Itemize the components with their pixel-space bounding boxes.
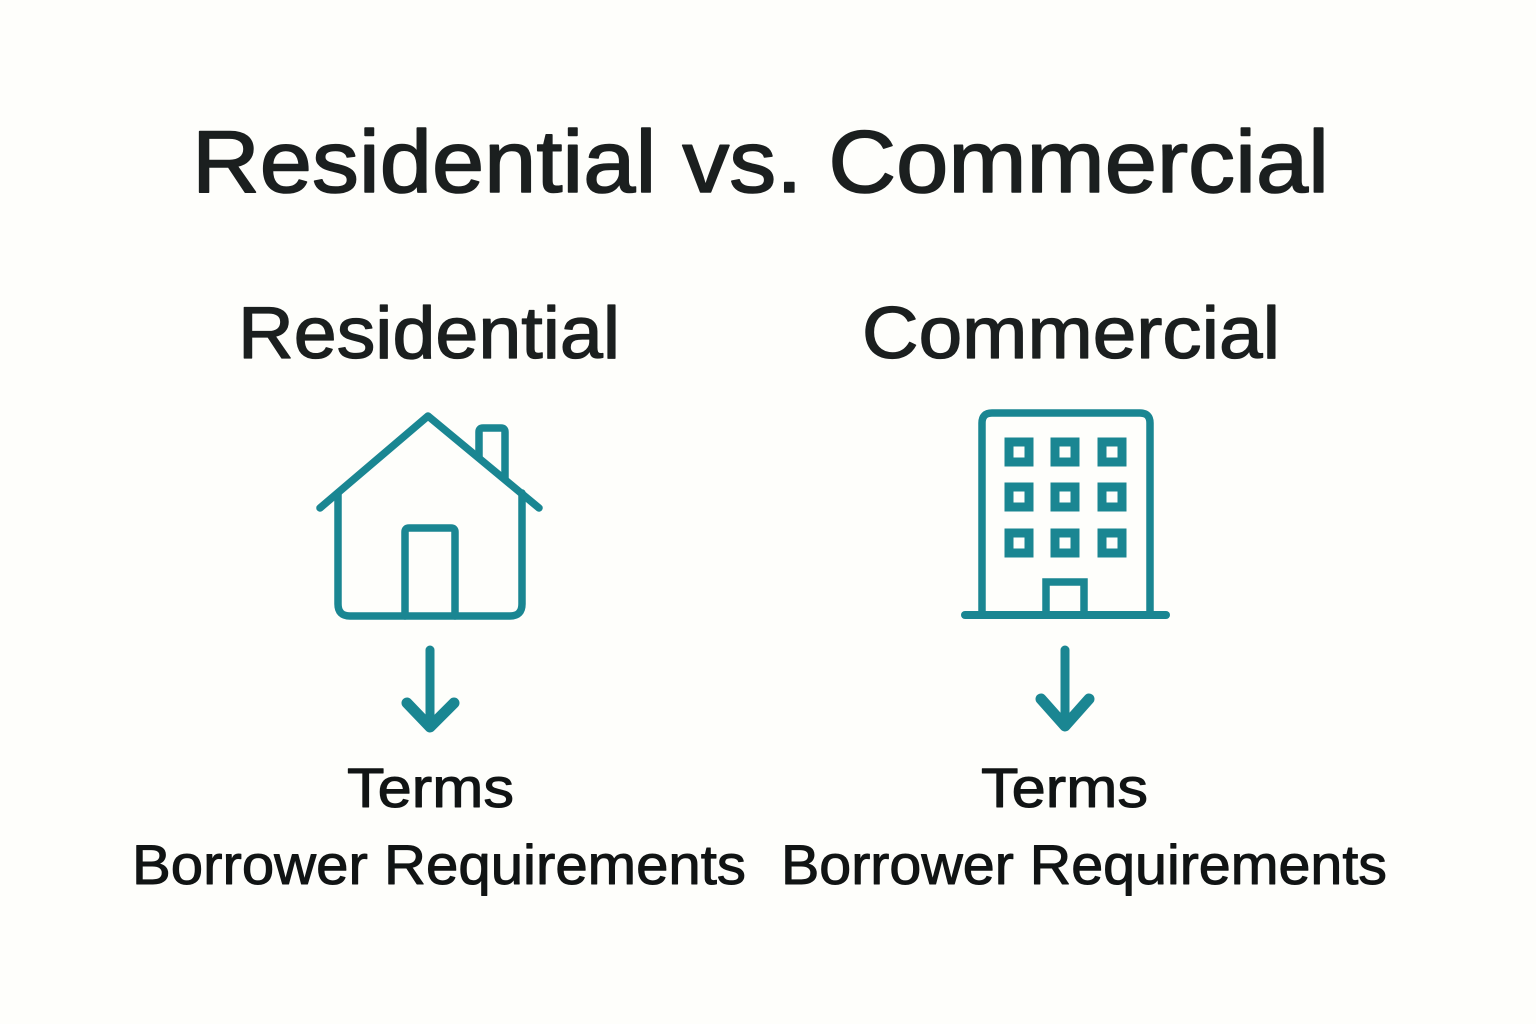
label: residential terms: Terms: [347, 756, 514, 819]
title: Residential vs. Commercial: [192, 112, 1329, 211]
panel: commercial: [781, 293, 1387, 896]
windows: [1009, 442, 1122, 553]
label: commercial terms: Terms: [981, 756, 1148, 819]
arrow: commercial down: [1041, 650, 1089, 726]
panel: residential: [132, 293, 746, 896]
heading: residential: Residential: [238, 293, 620, 374]
heading: commercial: Commercial: [862, 293, 1280, 374]
arrow: residential down: [407, 650, 454, 727]
label: commercial borrower requirements: Borrower Requirements: [781, 833, 1387, 896]
icon: office building: [965, 413, 1166, 615]
icon: house: [320, 416, 539, 616]
label: residential borrower requirements: Borrower Requirements: [132, 833, 746, 896]
